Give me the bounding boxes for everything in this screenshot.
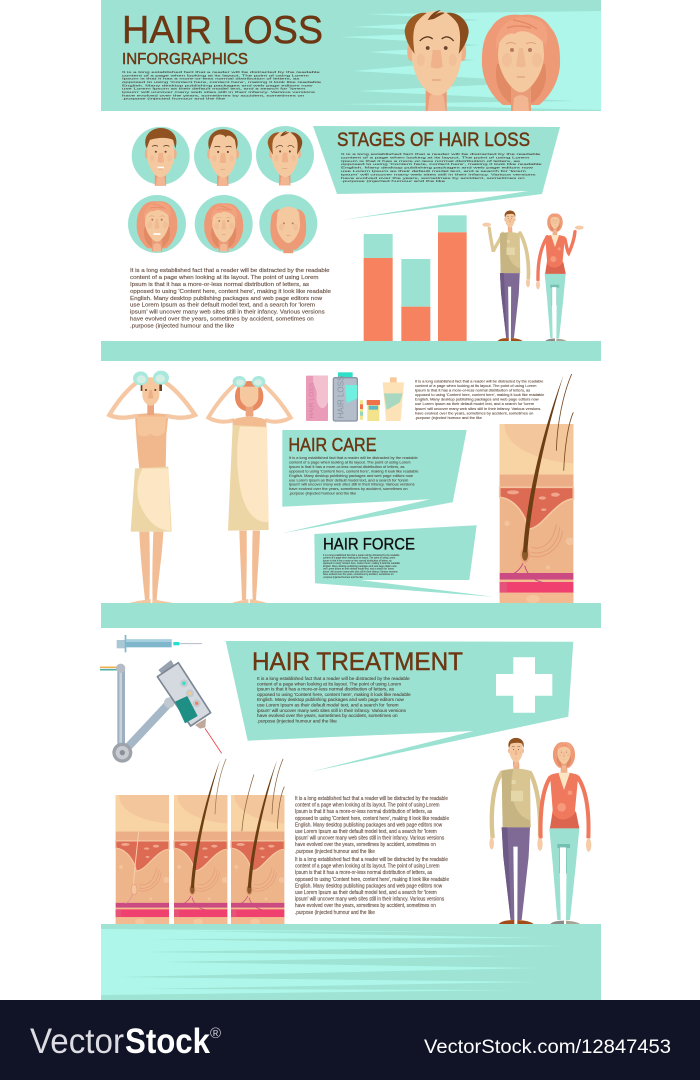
figure: man standing <box>489 738 543 924</box>
bottom text block 1: It is a long established fact that a reader will be distracted by the readable <box>295 796 448 802</box>
subtitle: infographics: INFORGRAPHICS <box>122 51 248 68</box>
bottom text block 2 <box>295 857 449 916</box>
bottom text block 1: opposed to using 'Content here, content here', making it look like readable <box>295 815 449 822</box>
bottom text block 1: have evolved over the years, sometimes by accident, sometimes on <box>295 842 436 848</box>
header text block: have evolved over the years, sometimes by accident, sometimes on <box>122 94 305 97</box>
bottom text block 2: ipsum' will uncover many web sites still in their infancy. Various versions <box>295 896 445 903</box>
stages text block: ipsum' will uncover many web sites still in their infancy. Various versions <box>341 173 536 177</box>
bottom text block 2: English. Many desktop publishing packages and web page editors now <box>295 883 442 890</box>
hair force text block: ipsum' will uncover many web sites still in their infancy. Various versions <box>323 571 398 573</box>
footer logo: ® <box>210 1025 221 1042</box>
bottom text block 1: use Lorem Ipsum as their default model text, and a search for 'lorem <box>295 829 437 835</box>
heading: stages of hair loss: STAGES OF HAIR LOSS <box>337 129 530 151</box>
figure: woman standing <box>541 742 591 924</box>
bottom text block 2: have evolved over the years, sometimes by accident, sometimes on <box>295 903 436 909</box>
stages left text block: have evolved over the years, sometimes by accident, sometimes on <box>130 317 314 323</box>
hair care text block: ipsum' will uncover many web sites still in their infancy. Various versions <box>289 483 415 487</box>
text block beside products: Ipsum is that it has a more-or-less normal distribution of letters, as <box>415 388 530 393</box>
header banner <box>101 0 601 111</box>
hair care text block: Ipsum is that it has a more-or-less normal distribution of letters, as <box>289 465 405 469</box>
hair care text block: .purpose (injected humour and the like <box>289 492 356 496</box>
icon: header man face <box>405 10 469 111</box>
bottom banner <box>101 924 601 1000</box>
header text block: use Lorem Ipsum as their default model text, and a search for 'lorem <box>122 87 305 91</box>
stages left text block: opposed to using 'Content here, content here', making it look like readable <box>130 289 332 295</box>
hair force text block: .purpose (injected humour and the like <box>323 576 364 579</box>
header text block: .purpose (injected humour and the like <box>122 97 226 101</box>
hair care text block: use Lorem Ipsum as their default model text, and a search for 'lorem <box>289 478 408 482</box>
stages text block: content of a page when looking at its layout. The point of using Lorem <box>341 156 529 160</box>
hair force text block <box>323 554 401 579</box>
divider band 1 <box>101 341 601 361</box>
hair care text block <box>289 456 419 496</box>
bottom text block 1: English. Many desktop publishing packages and web page editors now <box>295 822 442 829</box>
text block beside products: opposed to using 'Content here, content here', making it look like readable <box>415 392 544 397</box>
panel: stages of hair loss faces <box>128 126 317 253</box>
header text block: ipsum' will uncover many web sites still in their infancy. Various versions <box>122 91 316 94</box>
figure: standing woman, arm raised <box>536 214 584 341</box>
stages text block: Ipsum is that it has a more-or-less normal distribution of letters, as <box>341 159 521 163</box>
panel: hair care speech bubble <box>282 430 467 533</box>
hair force text block: English. Many desktop publishing packages and web page editors now <box>323 565 397 568</box>
header text block: opposed to using 'Content here, content here', making it look like readable <box>122 81 322 84</box>
heading: hair force: HAIR FORCE <box>323 536 415 554</box>
hair care text block: It is a long established fact that a reader will be distracted by the readable <box>289 456 418 460</box>
stages text block <box>341 153 542 183</box>
bar chart <box>364 215 467 341</box>
bottom text block 2: opposed to using 'Content here, content here', making it look like readable <box>295 876 449 883</box>
stages text block: have evolved over the years, sometimes by accident, sometimes on <box>341 176 525 180</box>
header text block: It is a long established fact that a reader will be distracted by the readable <box>122 71 320 74</box>
hair treatment text block: English. Many desktop publishing packages and web page editors now <box>257 697 405 702</box>
footer logo: Vector <box>30 1022 124 1061</box>
stages text block: opposed to using 'Content here, content here', making it look like readable <box>341 163 542 166</box>
bottom text block 2: use Lorem Ipsum as their default model text, and a search for 'lorem <box>295 890 437 896</box>
icon: header woman face <box>482 15 560 111</box>
bottom text block 1: Ipsum is that it has a more-or-less normal distribution of letters, as <box>295 809 433 815</box>
hair treatment text block: ipsum' will uncover many web sites still in their infancy. Various versions <box>257 708 407 713</box>
text block beside products: content of a page when looking at its layout. The point of using Lorem <box>415 383 536 388</box>
hair care text block: English. Many desktop publishing packages and web page editors now <box>289 474 413 478</box>
header text block: Ipsum is that it has a more-or-less normal distribution of letters, as <box>122 77 300 81</box>
hair care text block: opposed to using 'Content here, content here', making it look like readable <box>289 469 419 473</box>
stages text block: use Lorem Ipsum as their default model text, and a search for 'lorem <box>341 170 526 173</box>
panel: stages speech bubble <box>313 126 560 220</box>
hair force text block: content of a page when looking at its layout. The point of using Lorem <box>323 557 395 560</box>
diagram: follicle stage 1 <box>116 795 169 925</box>
hair treatment text block: opposed to using 'Content here, content here', making it look like readable <box>257 692 411 697</box>
bottom text block 2: content of a page when looking at its layout. The point of using Lorem <box>295 863 439 870</box>
hair care text block: have evolved over the years, sometimes by accident, sometimes on <box>289 487 408 491</box>
hair treatment text block: have evolved over the years, sometimes by accident, sometimes on <box>257 713 398 718</box>
stages left text block: ipsum' will uncover many web sites still in their infancy. Various versions <box>130 310 325 316</box>
hair force text block: It is a long established fact that a reader will be distracted by the readable <box>323 554 400 557</box>
hair force text block: Ipsum is that it has a more-or-less normal distribution of letters, as <box>323 560 392 562</box>
stages left text block: English. Many desktop publishing packages and web page editors now <box>130 296 323 302</box>
hair treatment text block: content of a page when looking at its layout. The point of using Lorem <box>257 681 401 686</box>
text block beside products: ipsum' will uncover many web sites still in their infancy. Various versions <box>415 406 540 411</box>
figure: standing man, arm raised <box>482 211 530 341</box>
diagram: follicle stage 2 <box>174 759 228 925</box>
footer logo: Stock <box>125 1022 210 1061</box>
icon group: hair care products: HAIR LOSS <box>336 376 345 418</box>
hair care text block: content of a page when looking at its layout. The point of using Lorem <box>289 461 411 464</box>
stages left text block <box>130 268 332 330</box>
bottom text block 2: Ipsum is that it has a more-or-less normal distribution of letters, as <box>295 870 433 876</box>
bottom text block 2: It is a long established fact that a reader will be distracted by the readable <box>295 857 448 863</box>
figure: man in towel washing hair <box>109 371 195 604</box>
header text block: content of a page when looking at its layout. The point of using Lorem <box>122 74 309 78</box>
icon: medical cross <box>496 657 552 713</box>
footer logo <box>30 1022 221 1061</box>
bottom text block 1: .purpose (injected humour and the like <box>295 848 375 855</box>
hair force text block: have evolved over the years, sometimes by accident, sometimes on <box>323 573 394 576</box>
hair treatment text block: It is a long established fact that a reader will be distracted by the readable <box>257 676 410 681</box>
stages left text block: use Lorem Ipsum as their default model text, and a search for 'lorem <box>130 303 315 309</box>
text block beside products <box>415 379 544 420</box>
title: hair loss: HAIR LOSS <box>122 9 323 52</box>
stages left text block: Ipsum is that it has a more-or-less normal distribution of letters, as <box>130 282 309 288</box>
text block beside products: have evolved over the years, sometimes by accident, sometimes on <box>415 410 533 415</box>
hair treatment text block: use Lorem Ipsum as their default model text, and a search for 'lorem <box>257 703 399 707</box>
icon group: hair care products: HAIR LOSS <box>308 382 315 418</box>
footer bar <box>0 1000 700 1080</box>
stages left text block: content of a page when looking at its layout. The point of using Lorem <box>130 275 319 281</box>
heading: hair treatment: HAIR TREATMENT <box>252 648 463 676</box>
hair treatment text block: Ipsum is that it has a more-or-less normal distribution of letters, as <box>257 687 395 692</box>
icon: syringe <box>117 635 202 652</box>
header text block: English. Many desktop publishing packages and web page editors now <box>122 84 313 87</box>
text block beside products: use Lorem Ipsum as their default model text, and a search for 'lorem <box>415 401 534 406</box>
footer image id: VectorStock.com/12847453 <box>424 1037 671 1058</box>
diagram: follicle stage 3 <box>231 759 285 925</box>
icon: laser treatment device <box>100 660 222 763</box>
stages text block: It is a long established fact that a reader will be distracted by the readable <box>341 153 541 156</box>
text block beside products: It is a long established fact that a reader will be distracted by the readable <box>415 379 543 383</box>
bottom text block 1: content of a page when looking at its layout. The point of using Lorem <box>295 802 439 809</box>
hair force text block: opposed to using 'Content here, content here', making it look like readable <box>323 562 401 565</box>
divider band 2 <box>101 603 601 628</box>
text block beside products: .purpose (injected humour and the like <box>415 415 482 420</box>
hair treatment text block: .purpose (injected humour and the like <box>257 719 337 723</box>
stages left text block: It is a long established fact that a reader will be distracted by the readable <box>130 268 330 274</box>
stages left text block: .purpose (injected humour and the like <box>130 324 235 330</box>
stages text block: English. Many desktop publishing packages and web page editors now <box>341 166 534 170</box>
diagram: hair follicle cross-section <box>500 374 574 603</box>
hair force text block: use Lorem Ipsum as their default model text, and a search for 'lorem <box>323 568 394 571</box>
icon group: hair care products <box>306 372 404 421</box>
text block beside products: English. Many desktop publishing packages and web page editors now <box>415 397 539 402</box>
panel: hair force speech bubble <box>314 525 493 597</box>
bottom text block 1 <box>295 796 449 855</box>
bottom text block 2: .purpose (injected humour and the like <box>295 909 375 916</box>
stages text block: .purpose (injected humour and the like <box>341 180 446 183</box>
figure: woman in towel washing hair <box>208 376 291 604</box>
hair treatment text block <box>257 676 411 723</box>
header text block <box>122 71 322 101</box>
bottom text block 1: ipsum' will uncover many web sites still in their infancy. Various versions <box>295 835 445 842</box>
heading: hair care: HAIR CARE <box>288 435 376 455</box>
panel: hair treatment speech bubble <box>226 641 573 772</box>
